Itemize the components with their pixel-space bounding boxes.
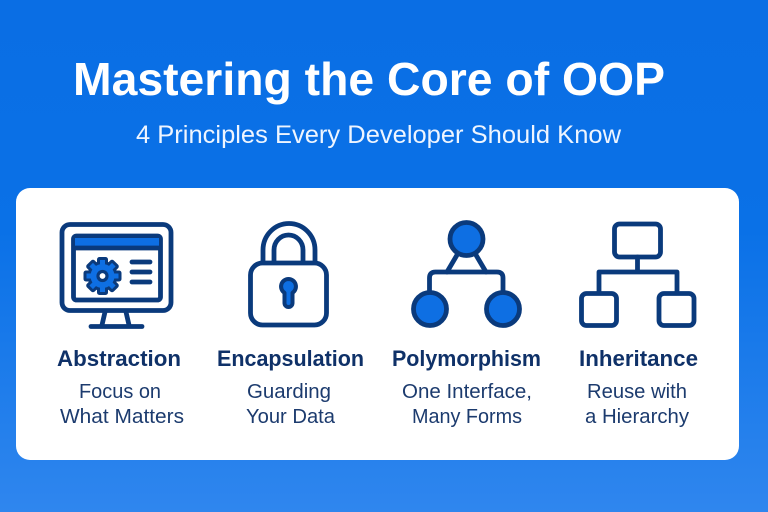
label: inheritance (579, 346, 698, 428)
icon: polymorphism nodes (414, 222, 520, 326)
label: encapsulation (217, 346, 364, 428)
title: Mastering the Core of OOP (73, 53, 665, 105)
label: polymorphism (392, 346, 541, 428)
icon: encapsulation padlock (250, 223, 326, 325)
icon: abstraction monitor (62, 224, 171, 326)
label: polymorphism: Polymorphism (392, 346, 541, 371)
label: abstraction: What Matters (60, 405, 184, 428)
label: inheritance: a Hierarchy (585, 405, 690, 428)
label: encapsulation: Your Data (246, 405, 336, 428)
label: encapsulation: Guarding (247, 380, 331, 403)
label: abstraction: Focus on (79, 380, 161, 403)
label: encapsulation: Encapsulation (217, 346, 364, 371)
subtitle: 4 Principles Every Developer Should Know (136, 121, 622, 149)
label: abstraction (57, 346, 184, 428)
label: polymorphism: One Interface, (402, 380, 532, 403)
label: inheritance: Inheritance (579, 346, 698, 371)
label: polymorphism: Many Forms (412, 405, 522, 428)
label: inheritance: Reuse with (587, 380, 687, 403)
label: abstraction: Abstraction (57, 346, 181, 371)
panel: principles card (16, 188, 739, 460)
icon: inheritance hierarchy (582, 224, 694, 326)
